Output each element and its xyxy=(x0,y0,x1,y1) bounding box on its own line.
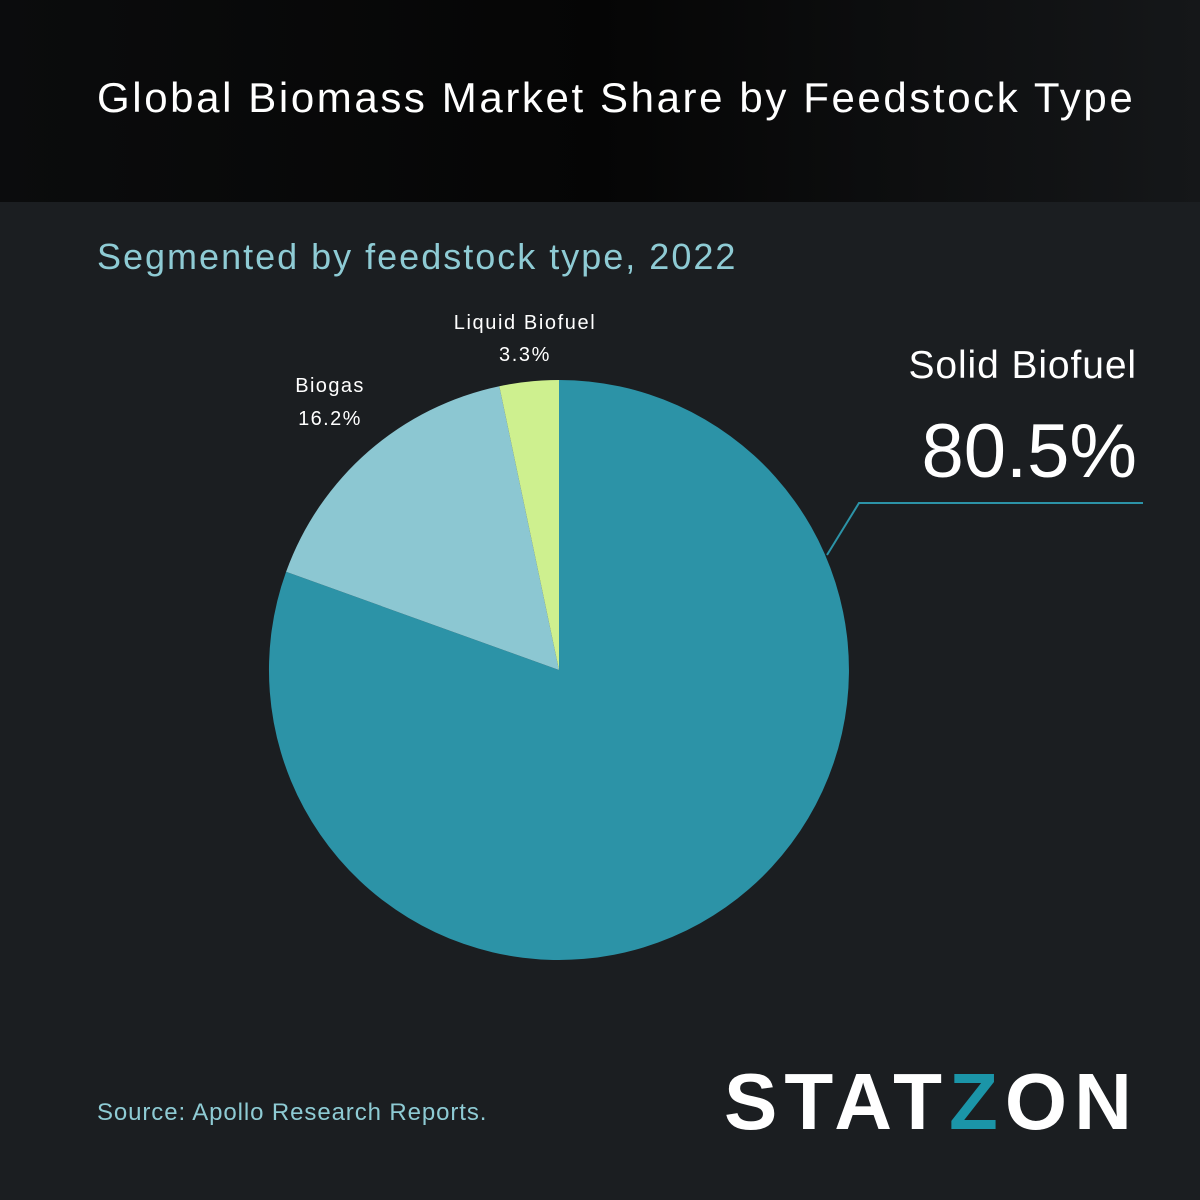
source: Source: Apollo Research Reports. xyxy=(97,1099,487,1126)
title: Global Biomass Market Share by Feedstock Type xyxy=(97,74,1135,121)
label: biogas: Biogas xyxy=(295,375,365,397)
label: biogas: 16.2% xyxy=(298,408,362,430)
logo: STATZON xyxy=(724,1057,1139,1146)
label: liquid biofuel: 3.3% xyxy=(499,344,551,366)
header band xyxy=(0,0,1200,202)
label: liquid biofuel xyxy=(454,312,596,366)
callout: solid biofuel xyxy=(908,344,1137,494)
callout: solid biofuel: Solid Biofuel xyxy=(908,344,1137,387)
label: liquid biofuel: Liquid Biofuel xyxy=(454,312,596,334)
subtitle: Segmented by feedstock type, 2022 xyxy=(97,236,737,277)
label: biogas xyxy=(295,375,365,430)
slice: solid biofuel xyxy=(269,380,849,960)
leader line xyxy=(827,503,1143,555)
slice: biogas xyxy=(286,386,559,670)
callout: solid biofuel: 80.5% xyxy=(922,409,1137,494)
slice: liquid biofuel xyxy=(499,380,559,670)
